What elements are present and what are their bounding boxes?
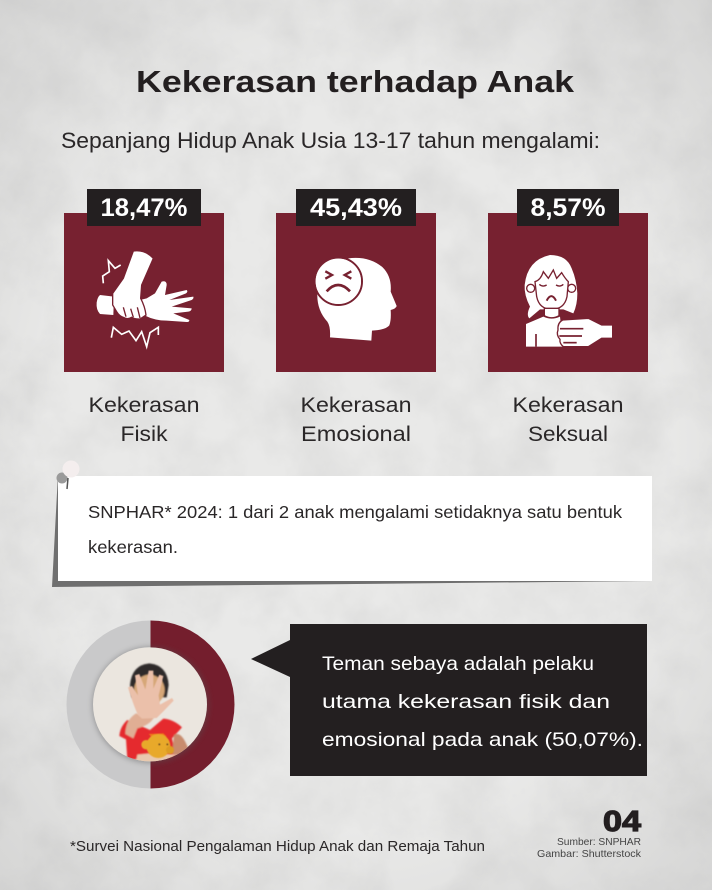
percentage badge: 8,57% [517, 189, 619, 226]
note text [88, 502, 622, 557]
label: kekerasan emosional: Kekerasan [300, 393, 412, 417]
photo: child raising a hand and holding a teddy [93, 647, 207, 762]
bubble text: utama kekerasan fisik dan [322, 691, 610, 713]
panel: kekerasan fisik [64, 189, 224, 446]
card background: emosional [276, 213, 436, 372]
title: Kekerasan terhadap Anak [136, 64, 575, 99]
bubble body with pointer [251, 624, 647, 776]
speech bubble [251, 624, 647, 776]
percentage badge: 18,47%: 18,47% [100, 194, 188, 222]
percentage badge: 45,43% [296, 189, 416, 226]
label: kekerasan seksual: Kekerasan [512, 393, 624, 417]
page number: 04 [603, 806, 641, 838]
label: kekerasan seksual [512, 393, 624, 446]
icon: girl with a hand on chest [525, 255, 613, 347]
card background: fisik [64, 213, 224, 372]
label: kekerasan fisik [88, 393, 200, 446]
bubble text: Teman sebaya adalah pelaku [322, 653, 594, 675]
donut chart with photo [67, 620, 235, 788]
bubble text [322, 653, 643, 751]
donut: grey half [67, 620, 150, 788]
source credits [537, 836, 642, 860]
card background: seksual [488, 213, 648, 372]
note text: kekerasan. [88, 537, 178, 557]
label: kekerasan emosional [300, 393, 412, 446]
bubble text: emosional pada anak (50,07%). [322, 729, 643, 751]
source credits: Sumber: SNPHAR [557, 836, 641, 848]
panel: kekerasan seksual [488, 189, 648, 446]
note shadow [52, 474, 652, 587]
note text: SNPHAR* 2024: 1 dari 2 anak mengalami setidaknya satu bentuk [88, 502, 622, 522]
label: kekerasan fisik: Fisik [120, 422, 168, 446]
source credits: Gambar: Shutterstock [537, 848, 642, 860]
icon: arm being grabbed [97, 251, 193, 347]
callout: pinned note [52, 460, 652, 587]
percentage badge: 45,43%: 45,43% [310, 194, 402, 222]
label: kekerasan seksual: Seksual [528, 422, 608, 446]
note paper [58, 476, 652, 581]
percentage badge: 8,57%: 8,57% [530, 194, 606, 222]
footnote: *Survei Nasional Pengalaman Hidup Anak dan Remaja Tahun [70, 839, 485, 855]
label: kekerasan fisik: Kekerasan [88, 393, 200, 417]
icon: push pin [56, 460, 80, 489]
icon: head with angry face [315, 258, 397, 341]
panel: kekerasan emosional [276, 189, 436, 446]
subtitle: Sepanjang Hidup Anak Usia 13-17 tahun mengalami: [61, 128, 600, 153]
percentage badge: 18,47% [87, 189, 201, 226]
donut: maroon half [150, 620, 234, 788]
label: kekerasan emosional: Emosional [301, 422, 411, 446]
